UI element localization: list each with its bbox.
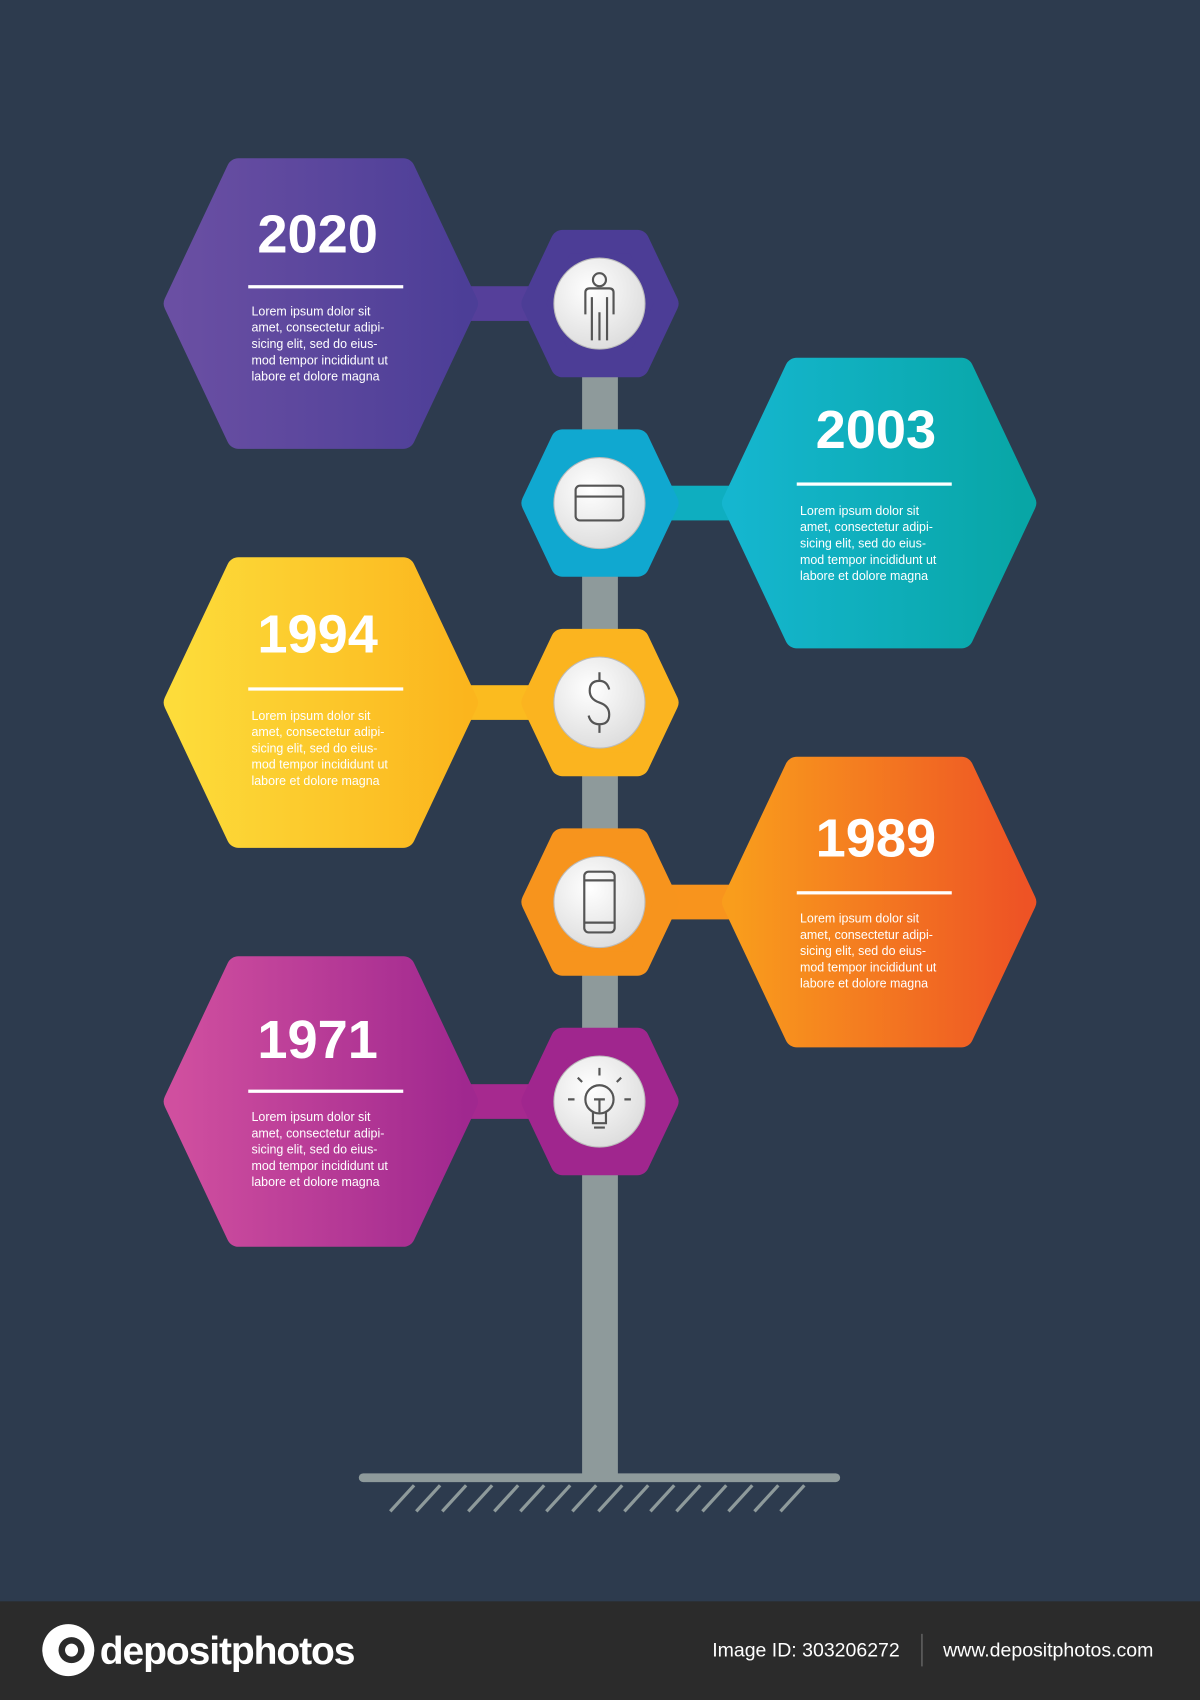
milestone 1971 (left): Lorem ipsum dolor sit: [251, 1110, 371, 1124]
milestone 1994 (left): [176, 569, 667, 836]
milestone 1989 (right): amet, consectetur adipi-: [800, 928, 933, 942]
milestone 1994 (left): sicing elit, sed do eius-: [251, 741, 377, 755]
milestone 2003 (right): [533, 370, 1024, 636]
milestone 1971 (left): labore et dolore magna: [251, 1175, 380, 1189]
icon: card: [576, 486, 623, 520]
icon: person: [585, 273, 614, 340]
footer url: www.depositphotos.com: [942, 1640, 1153, 1662]
milestone 2020 (left): sicing elit, sed do eius-: [251, 337, 377, 351]
milestone 2003 (right): 2003: [816, 400, 936, 460]
milestone 1989 (right): Lorem ipsum dolor sit: [800, 912, 920, 926]
milestone 1989 (right): mod tempor incididunt ut: [800, 960, 937, 974]
milestone 1989 (right): 1989: [816, 809, 936, 869]
milestone 2003 (right): sicing elit, sed do eius-: [800, 537, 926, 551]
milestone 1971 (left): [176, 968, 667, 1235]
milestone 1994 (left): mod tempor incididunt ut: [251, 758, 388, 772]
milestone 2020 (left): mod tempor incididunt ut: [251, 353, 388, 367]
milestone 1994 (left): labore et dolore magna: [251, 774, 380, 788]
milestone 1971 (left): 1971: [257, 1010, 378, 1070]
milestone 1994 (left): amet, consectetur adipi-: [251, 725, 384, 739]
icon: bulb: [568, 1068, 631, 1128]
icon: phone: [584, 872, 615, 932]
milestone 2003 (right): Lorem ipsum dolor sit: [800, 504, 920, 518]
milestone 1994 (left): 1994: [257, 605, 378, 665]
pole: [582, 358, 618, 1477]
milestone 2003 (right): amet, consectetur adipi-: [800, 520, 933, 534]
milestone 1989 (right): sicing elit, sed do eius-: [800, 944, 926, 958]
milestone 2020 (left): amet, consectetur adipi-: [251, 321, 384, 335]
milestone 2003 (right): mod tempor incididunt ut: [800, 553, 937, 567]
milestone 2020 (left): labore et dolore magna: [251, 370, 380, 384]
footer logo: [42, 1624, 355, 1676]
ground base: [359, 1473, 840, 1511]
milestone 1994 (left): Lorem ipsum dolor sit: [251, 709, 371, 723]
footer logo: depositphotos: [100, 1630, 355, 1673]
footer bar: [0, 1601, 1200, 1700]
milestone 1971 (left): sicing elit, sed do eius-: [251, 1143, 377, 1157]
milestone 2020 (left): [176, 170, 667, 437]
milestone 1971 (left): mod tempor incididunt ut: [251, 1159, 388, 1173]
milestone 2020 (left): Lorem ipsum dolor sit: [251, 304, 371, 318]
footer image id: Image ID: 303206272: [712, 1640, 900, 1662]
milestone 1971 (left): amet, consectetur adipi-: [251, 1126, 384, 1140]
milestone 1989 (right): [533, 769, 1024, 1035]
milestone 2020 (left): 2020: [257, 205, 378, 265]
milestone 1989 (right): labore et dolore magna: [800, 977, 928, 991]
icon: dollar: [589, 672, 609, 733]
milestone 2003 (right): labore et dolore magna: [800, 569, 928, 583]
